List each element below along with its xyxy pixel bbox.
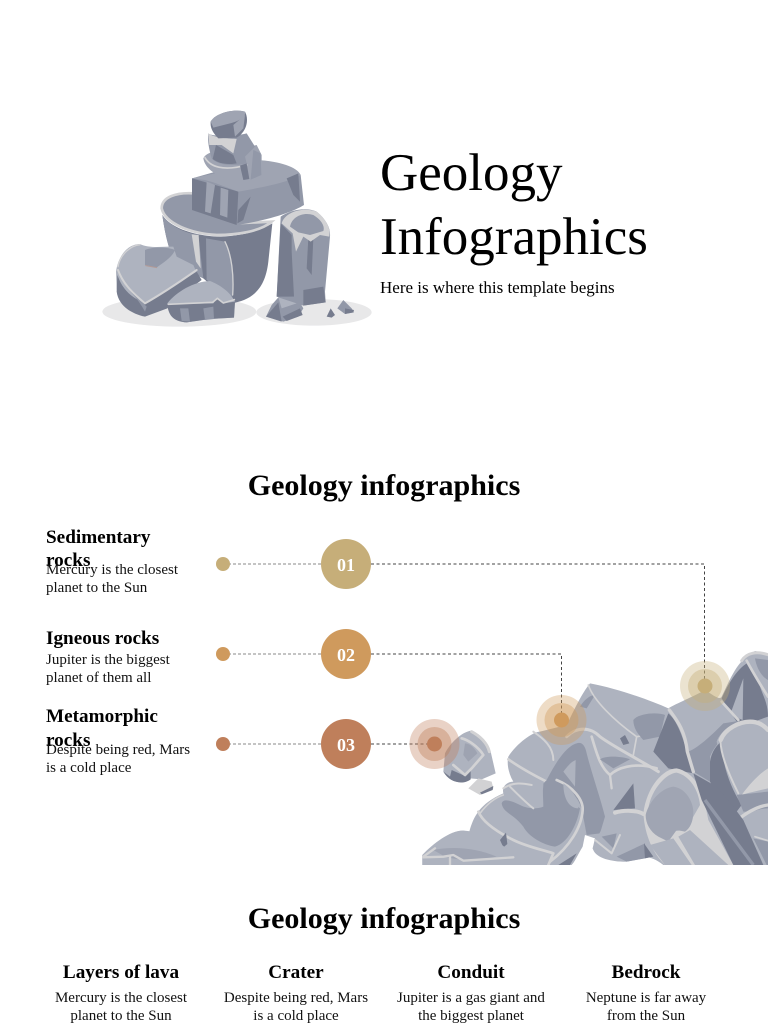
pulse marker one bbox=[680, 661, 730, 711]
item three: metamorphic rocks bbox=[46, 706, 371, 776]
item three: metamorphic rocks: rocks bbox=[46, 730, 90, 751]
item two: igneous rocks: Jupiter is the biggest bbox=[46, 652, 171, 668]
item one: sedimentary rocks: rocks bbox=[46, 550, 90, 571]
connector: item two bbox=[223, 654, 562, 720]
connector: item one bbox=[223, 564, 704, 686]
column: layers of lava: Mercury is the closest bbox=[55, 990, 188, 1006]
number badge two: 02 bbox=[337, 645, 355, 665]
column: conduit: the biggest planet bbox=[418, 1008, 525, 1024]
pulse marker two bbox=[536, 695, 586, 745]
far right rock bbox=[722, 663, 768, 727]
item two: igneous rocks bbox=[46, 628, 371, 686]
column: conduit: Jupiter is a gas giant and bbox=[397, 990, 545, 1006]
centre front rock bbox=[633, 773, 657, 810]
left mid rock details bbox=[502, 778, 580, 847]
column: bedrock bbox=[586, 962, 707, 1024]
column: conduit bbox=[397, 962, 545, 1024]
item one: sedimentary rocks: Mercury is the closest bbox=[46, 562, 179, 578]
heading: section two: Geology infographics bbox=[248, 902, 520, 935]
dark slab bbox=[693, 773, 763, 865]
column: layers of lava: planet to the Sun bbox=[70, 1008, 172, 1024]
item two: igneous rocks: Igneous rocks bbox=[46, 628, 159, 649]
item two: igneous rocks: planet of them all bbox=[46, 670, 151, 686]
item three: metamorphic rocks: Despite being red, Mars bbox=[46, 742, 190, 758]
item one: sedimentary rocks bbox=[46, 527, 371, 596]
number badge three bbox=[321, 719, 371, 769]
connector: item three bbox=[223, 743, 434, 745]
column: bedrock: from the Sun bbox=[607, 1008, 686, 1024]
item one: sedimentary rocks: planet to the Sun bbox=[46, 580, 148, 596]
illustration: rock pile bbox=[422, 651, 768, 865]
front right rock bbox=[643, 768, 733, 865]
pile base silhouette bbox=[422, 651, 768, 865]
column: conduit: Conduit bbox=[437, 962, 505, 983]
small rock bbox=[443, 731, 496, 795]
column: layers of lava: Layers of lava bbox=[63, 962, 179, 983]
right rocks bbox=[716, 724, 747, 744]
marker two bbox=[216, 647, 230, 661]
heading: section one: Geology infographics bbox=[248, 469, 520, 502]
column: bedrock: Bedrock bbox=[612, 962, 681, 983]
column: crater: is a cold place bbox=[253, 1008, 339, 1024]
column: crater: Despite being red, Mars bbox=[224, 990, 368, 1006]
number badge two bbox=[321, 629, 371, 679]
back rock details bbox=[580, 695, 595, 708]
item three: metamorphic rocks: is a cold place bbox=[46, 760, 132, 776]
left top rock details bbox=[508, 759, 547, 782]
pulse marker three bbox=[410, 719, 460, 769]
illustration: stacked rocks bbox=[102, 111, 372, 327]
item one: sedimentary rocks: Sedimentary bbox=[46, 527, 151, 548]
subtitle: Here is where this template begins bbox=[380, 278, 615, 297]
column: crater bbox=[224, 962, 368, 1024]
heading: main title: Infographics bbox=[380, 208, 648, 266]
column: crater: Crater bbox=[268, 962, 324, 983]
heading: main title: Geology bbox=[380, 144, 563, 202]
number badge one bbox=[321, 539, 371, 589]
column: layers of lava bbox=[55, 962, 188, 1024]
number badge three: 03 bbox=[337, 735, 355, 755]
marker three bbox=[216, 737, 230, 751]
bottom left rock bbox=[422, 830, 504, 865]
number badge one: 01 bbox=[337, 555, 355, 575]
item three: metamorphic rocks: Metamorphic bbox=[46, 706, 158, 727]
column: bedrock: Neptune is far away bbox=[586, 990, 707, 1006]
marker one bbox=[216, 557, 230, 571]
centre right rock bbox=[653, 713, 693, 773]
